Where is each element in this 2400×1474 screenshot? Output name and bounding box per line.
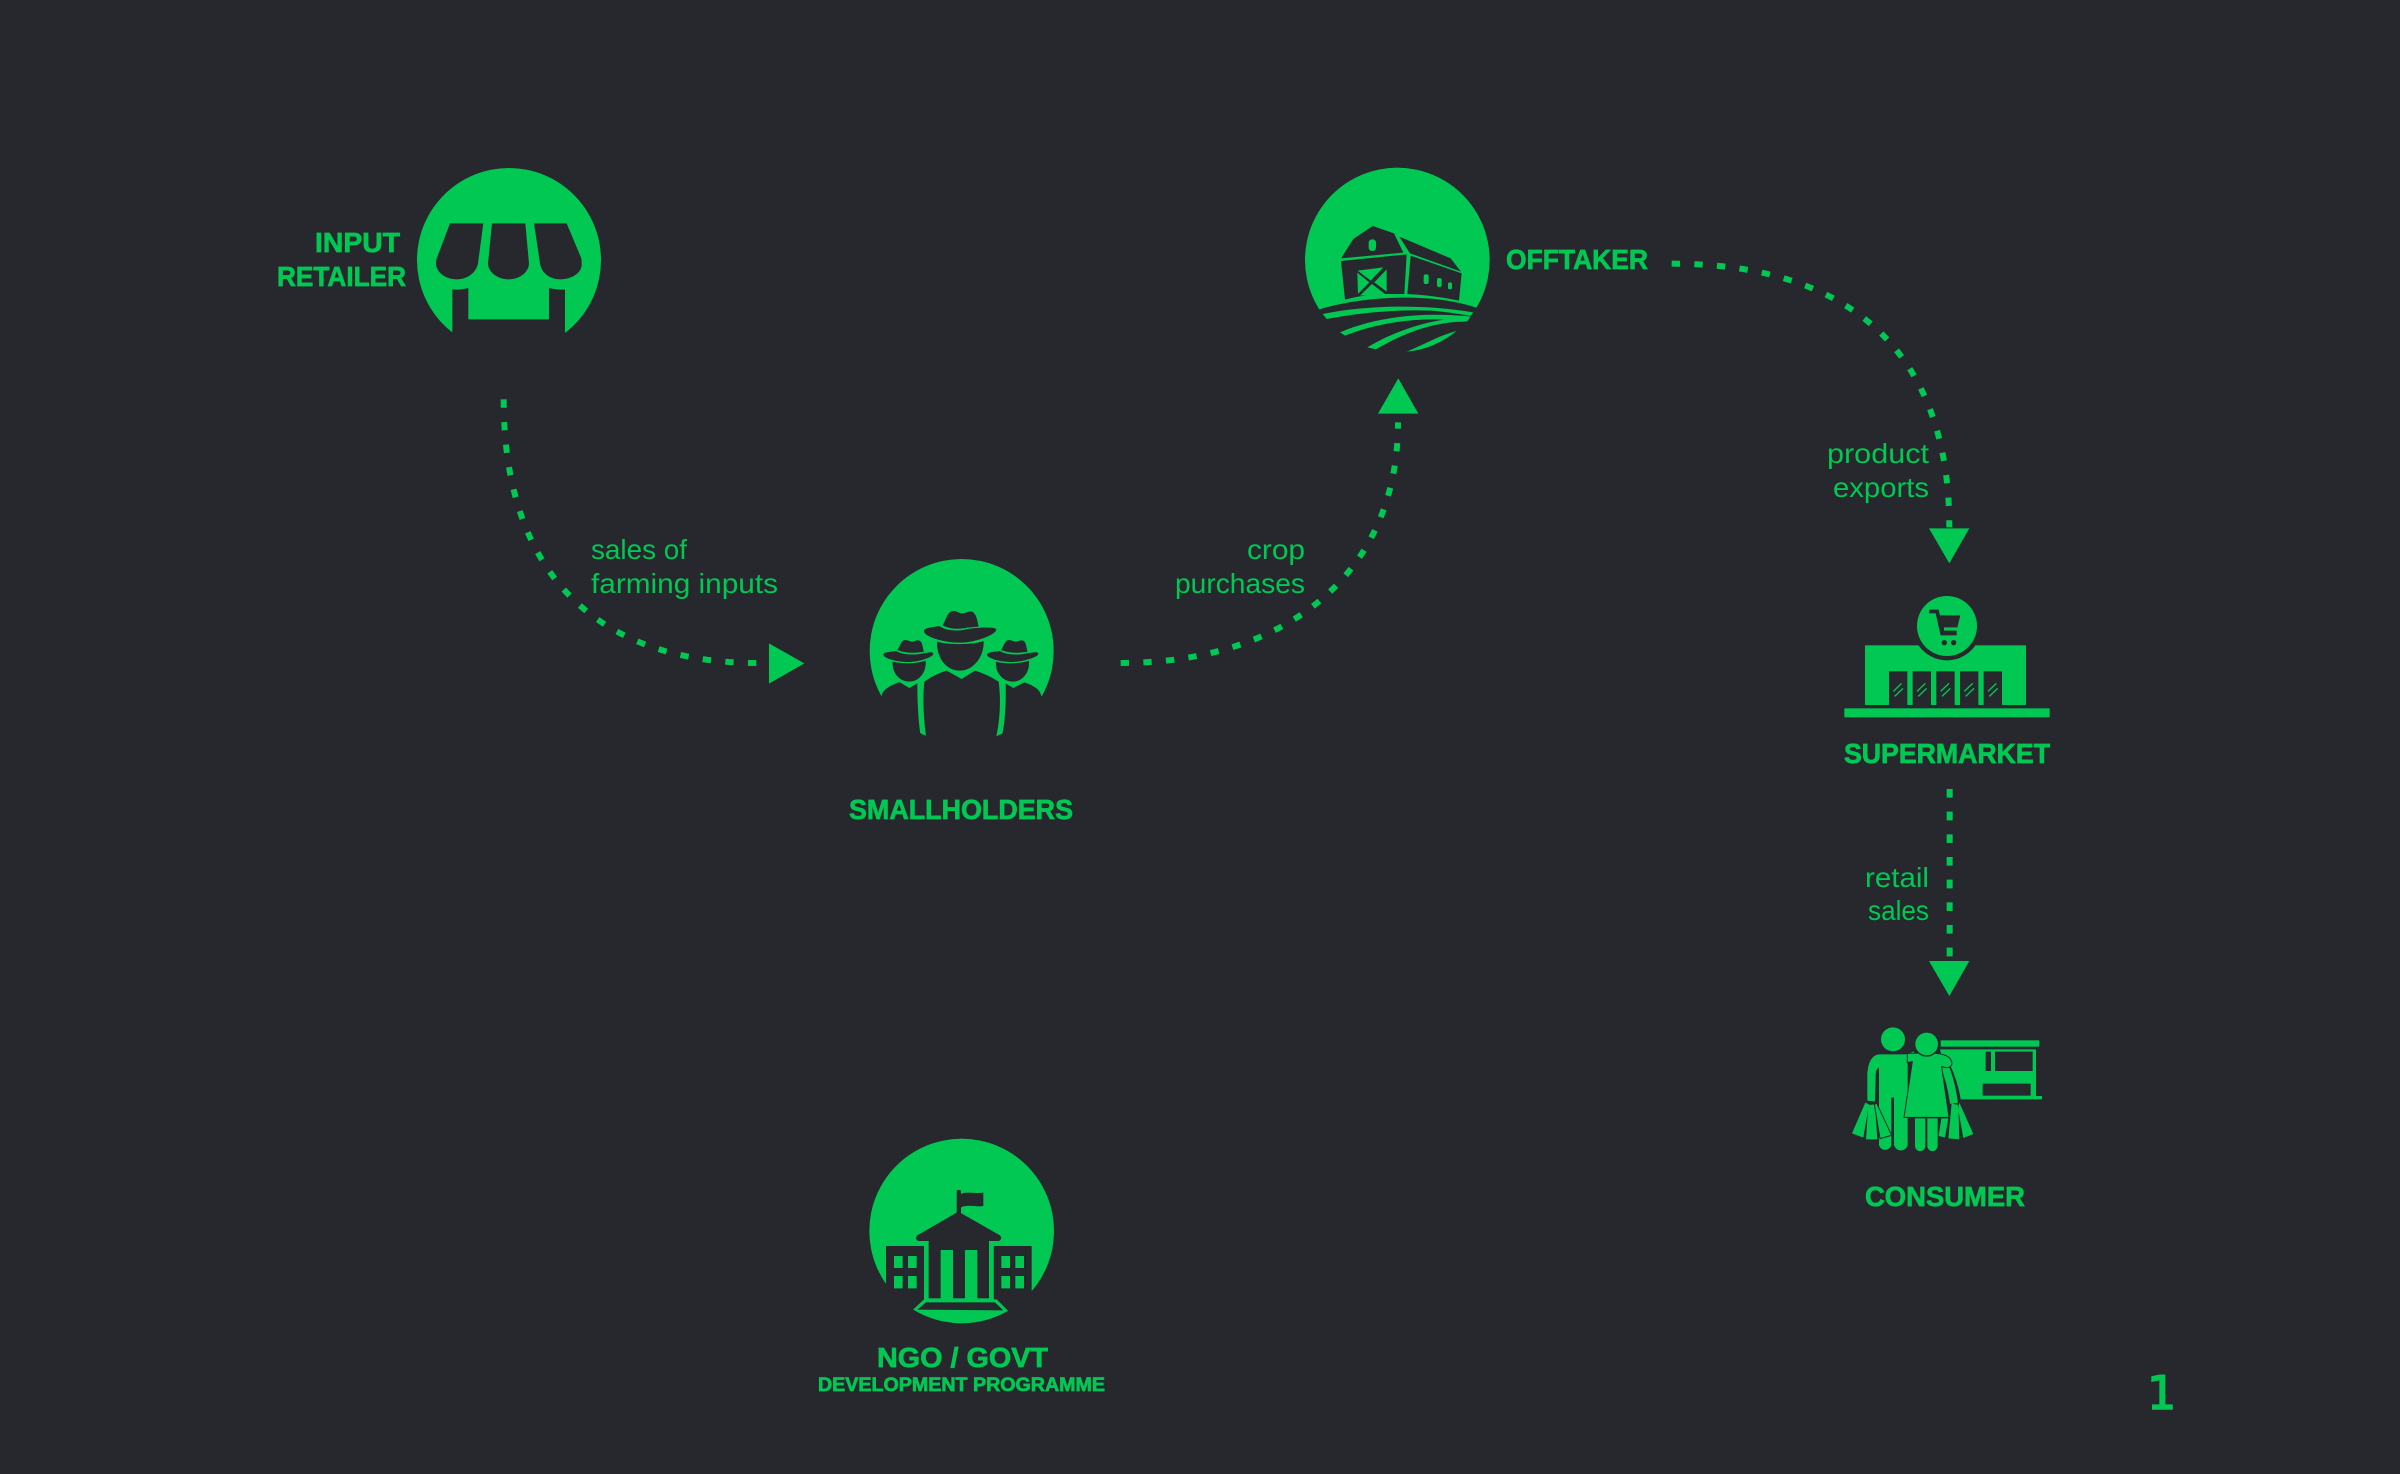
label: NGO / govt development programme: DEVELOPMENT PROGRAMME — [818, 1375, 1105, 1396]
text: retail sales — [1865, 862, 1929, 926]
label: NGO / govt development programme: NGO / GOVT — [877, 1342, 1048, 1373]
arrow: smallholders to offtaker — [1121, 378, 1418, 663]
icon: offtaker barn and fields — [1293, 168, 1507, 377]
text: sales of farming inputs: farming inputs — [591, 568, 778, 599]
icon: smallholder farmers — [860, 559, 1063, 753]
text: product exports: product — [1827, 438, 1929, 469]
label: smallholders: SMALLHOLDERS — [849, 794, 1073, 825]
arrow: supermarket to consumer — [1929, 789, 1969, 996]
icon: consumers with shopping bags — [1852, 1027, 2042, 1151]
label: input retailer — [277, 227, 406, 292]
text: crop purchases: crop — [1247, 534, 1305, 565]
text: sales of farming inputs — [591, 534, 778, 599]
label: consumer: CONSUMER — [1865, 1181, 2025, 1212]
label: offtaker: OFFTAKER — [1506, 244, 1648, 275]
arrow: offtaker to supermarket — [1672, 264, 1969, 563]
label: supermarket: SUPERMARKET — [1844, 738, 2050, 769]
text: retail sales: retail — [1865, 862, 1929, 893]
icon: supermarket — [1844, 592, 2050, 717]
page number: 1 — [2147, 1366, 2176, 1420]
text: product exports: exports — [1833, 472, 1929, 503]
label: NGO / govt development programme — [818, 1342, 1105, 1396]
text: crop purchases: purchases — [1175, 568, 1305, 599]
text: retail sales: sales — [1868, 895, 1929, 926]
icon: input retailer shop — [417, 168, 601, 363]
text: sales of farming inputs: sales of — [591, 534, 687, 565]
text: crop purchases — [1175, 534, 1305, 599]
icon: government building — [867, 1139, 1054, 1323]
label: input retailer: INPUT — [315, 227, 400, 258]
label: input retailer: RETAILER — [277, 261, 406, 292]
arrow: input retailer to smallholders — [504, 399, 804, 684]
text: product exports — [1827, 438, 1929, 503]
